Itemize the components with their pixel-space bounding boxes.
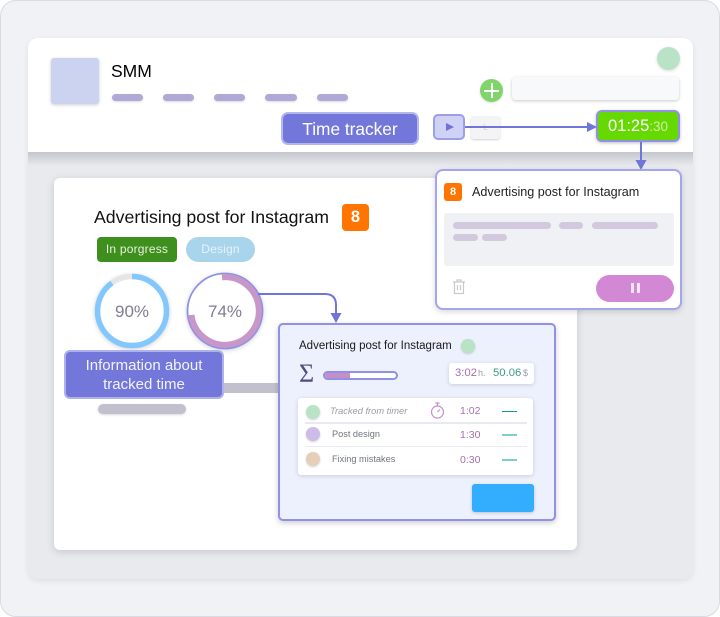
popup description box [444, 213, 674, 266]
status tag: In porgress [106, 242, 168, 256]
placeholder bar under label [98, 404, 186, 414]
task title: Advertising post for Instagram [94, 207, 329, 227]
detail panel [278, 323, 556, 521]
time and cost chip: 50.06 [493, 367, 521, 379]
task number badge [342, 204, 369, 231]
timer [596, 110, 680, 142]
row: post design: Post design [332, 429, 380, 439]
row: fixing mistakes: 0:30 [460, 454, 480, 466]
pause button [596, 275, 674, 302]
row: fixing mistakes: Fixing mistakes [332, 454, 395, 464]
time tracker label: Time tracker [302, 119, 398, 139]
icon: secondary button: L [483, 123, 488, 132]
row: fixing mistakes [305, 452, 517, 468]
progress ring 90% [93, 273, 171, 350]
time and cost chip: $ [523, 368, 528, 378]
time tracker label [281, 112, 419, 145]
row: tracked from timer: Tracked from timer [330, 406, 407, 416]
popup number badge: 8 [450, 186, 456, 198]
detail status dot [461, 339, 475, 353]
task number badge: 8 [351, 208, 360, 226]
info label [64, 350, 224, 399]
detail title: Advertising post for Instagram [299, 340, 452, 352]
user avatar [657, 47, 680, 70]
header shadow [28, 152, 693, 166]
row: post design: 1:30 [460, 429, 480, 441]
progress ring 90%: 90% [115, 302, 149, 321]
category tag [186, 237, 255, 262]
progress ring 74% [185, 272, 265, 352]
row: tracked from timer: 1:02 [460, 405, 480, 417]
search field [512, 77, 679, 100]
row: post design [305, 427, 517, 443]
header menu placeholders [112, 94, 348, 103]
info label: tracked time [103, 376, 185, 392]
placeholder bar behind label [220, 383, 290, 393]
row: tracked from timer [305, 405, 517, 421]
popup title: Advertising post for Instagram [472, 185, 639, 199]
main task card [54, 178, 577, 550]
info label: Information about [86, 357, 202, 374]
timer popup card [435, 169, 682, 310]
status tag [97, 237, 177, 262]
detail progress bar [323, 371, 398, 380]
timer: 01:25:30 [608, 117, 668, 135]
time and cost chip: 3:02 [455, 367, 477, 379]
category tag: Design [201, 242, 240, 256]
icon: secondary button [471, 116, 500, 139]
time and cost chip [449, 363, 534, 384]
project avatar [51, 58, 99, 104]
time and cost chip: h. [478, 368, 486, 378]
header bar [28, 38, 693, 152]
icon: trash [453, 279, 465, 294]
icon: add button [480, 79, 503, 102]
project name: SMM [111, 61, 152, 81]
icon: stopwatch [430, 402, 444, 419]
table dividers [305, 422, 527, 424]
icon: play button [433, 114, 465, 140]
time entries table [298, 398, 533, 475]
save button [472, 484, 534, 512]
icon: sigma: Σ [299, 359, 314, 388]
popup number badge [444, 183, 462, 201]
progress ring 74%: 74% [208, 302, 242, 321]
